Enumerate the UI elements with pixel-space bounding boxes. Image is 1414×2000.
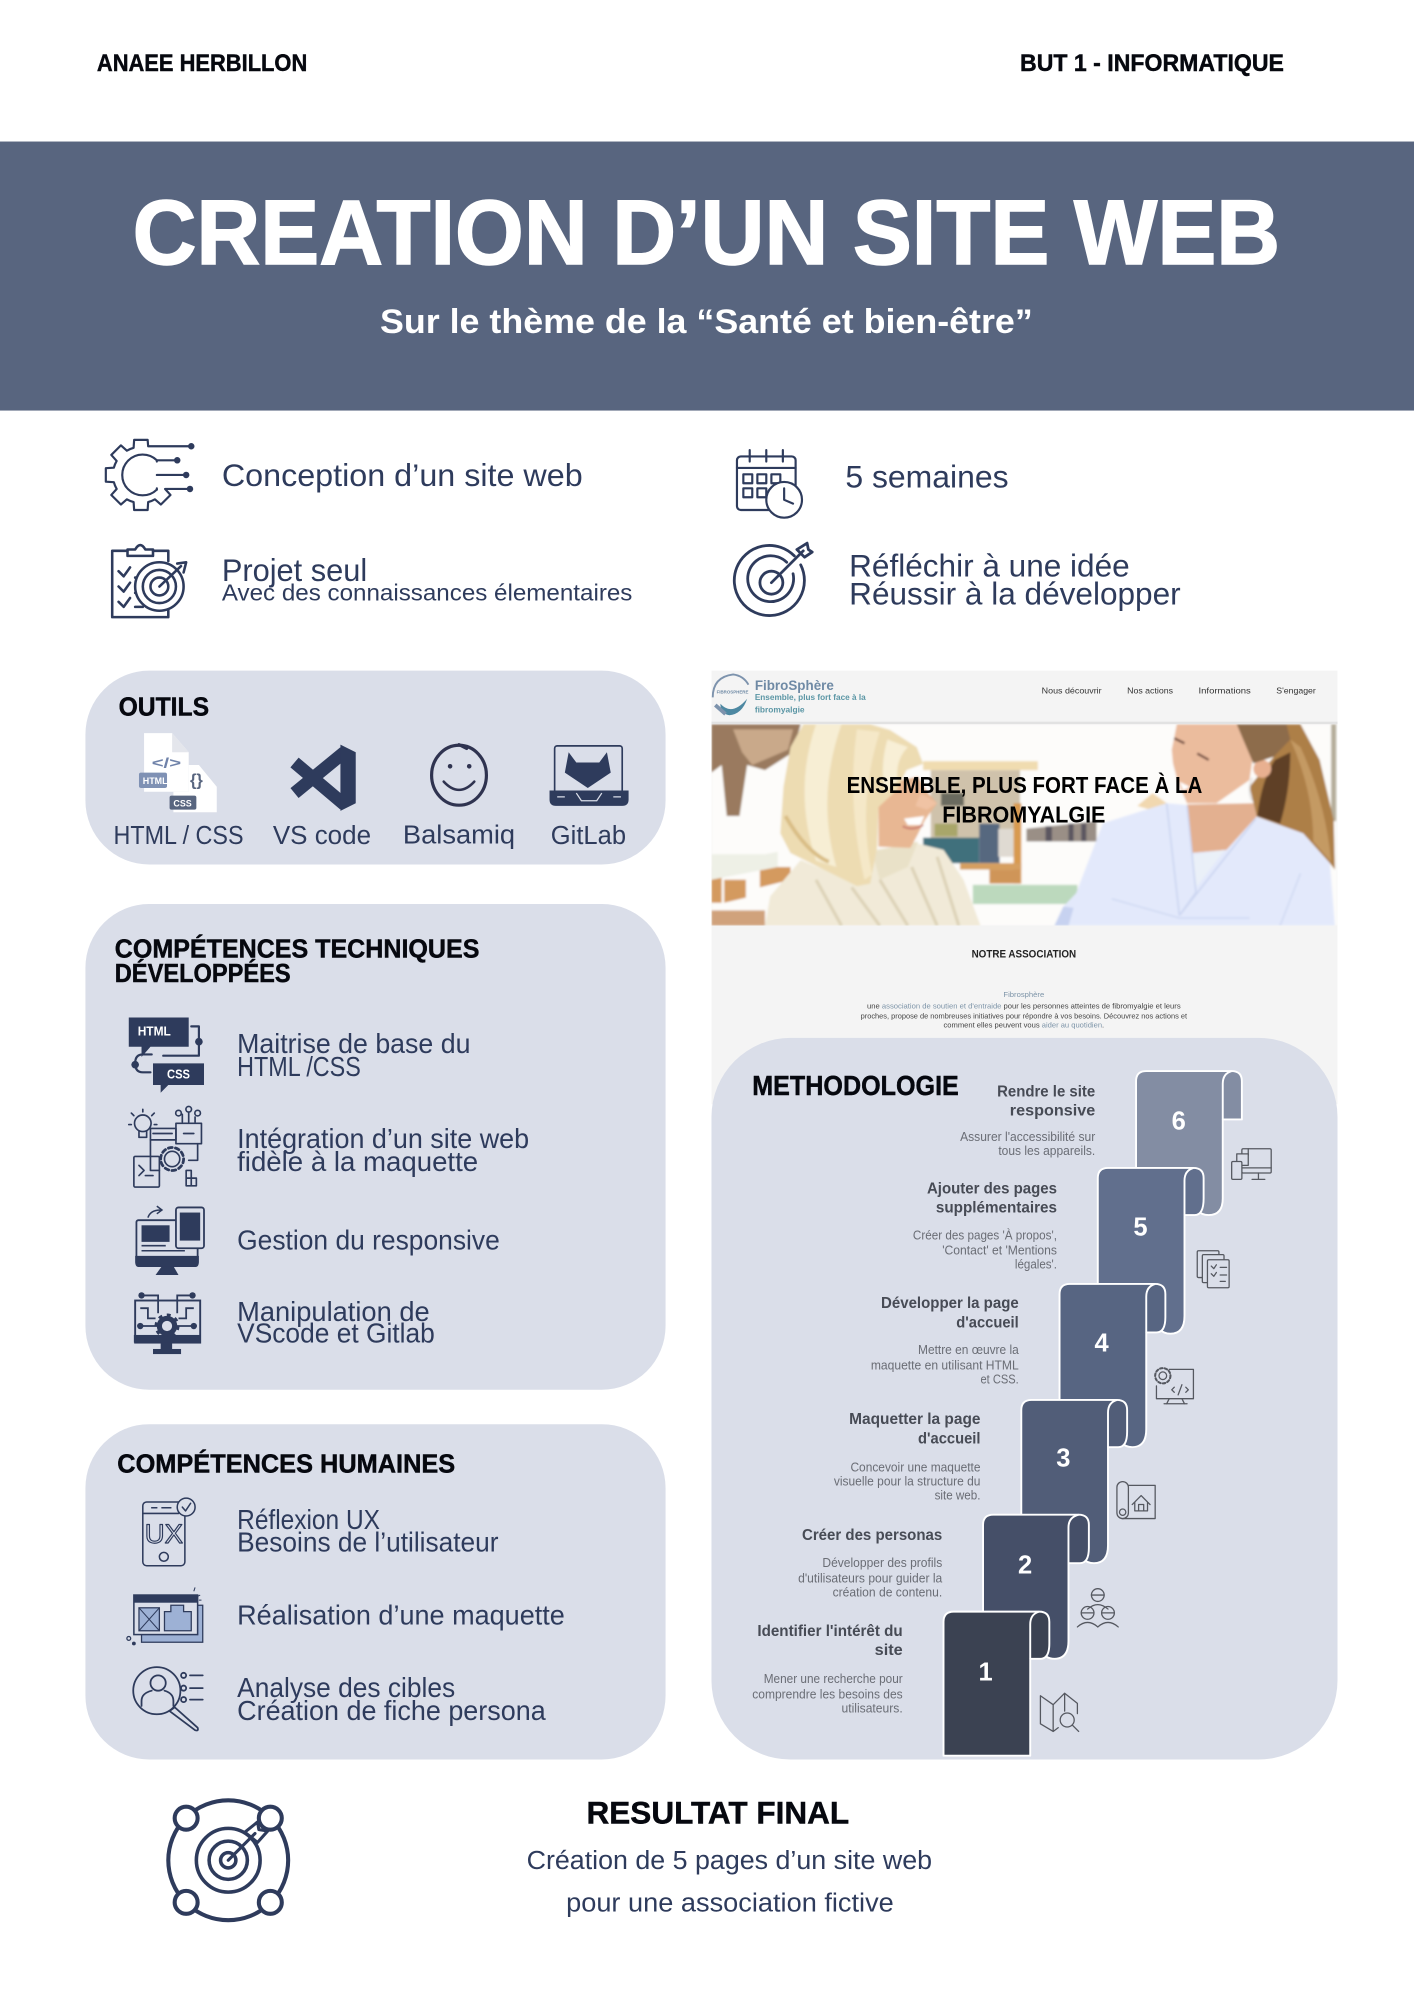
icon: result target xyxy=(168,1800,288,1920)
step 3 text: site web. xyxy=(935,1487,980,1502)
icon: integration xyxy=(129,1106,201,1187)
step 5 scroll xyxy=(1098,1168,1204,1334)
icon: gear and code monitor xyxy=(1155,1368,1193,1404)
website intro text: Fibrosphère xyxy=(1003,990,1044,999)
text: vscode gitlab: Manipulation de xyxy=(237,1296,430,1327)
icon: gitlab laptop xyxy=(550,746,629,806)
panel: competences techniques xyxy=(85,904,666,1390)
step 1 text: Identifier l'intérêt du xyxy=(757,1623,903,1640)
website nav links xyxy=(1042,686,1316,696)
step 6 text: responsive xyxy=(1010,1103,1095,1120)
website screenshot xyxy=(711,671,1337,1104)
step 4 text: d'accueil xyxy=(956,1314,1019,1331)
website tagline: Ensemble, plus fort face à la xyxy=(755,692,866,702)
step number 3: 3 xyxy=(1056,1444,1070,1472)
title banner xyxy=(0,142,1414,411)
icon: ux phone xyxy=(143,1498,195,1566)
result block xyxy=(527,1794,932,1917)
panel: outils xyxy=(85,671,666,864)
step 4 text: et CSS. xyxy=(980,1371,1019,1386)
website logo: FIBROSPHERE xyxy=(717,690,749,695)
result line 1: Création de 5 pages d’un site web xyxy=(527,1845,932,1875)
icon: html css files: HTML xyxy=(143,776,168,786)
heading: methodologie: METHODOLOGIE xyxy=(752,1070,959,1101)
step 2 text: d'utilisateurs pour guider la xyxy=(798,1570,943,1585)
step number 6: 6 xyxy=(1172,1108,1186,1136)
step 2 text: Créer des personas xyxy=(802,1527,942,1544)
step 3 scroll xyxy=(1021,1400,1127,1563)
result line 2: pour une association fictive xyxy=(566,1887,894,1917)
website tagline: fibromyalgie xyxy=(755,705,805,715)
step 6 text xyxy=(960,1084,1096,1158)
text: solo project xyxy=(222,552,632,606)
step 1 scroll xyxy=(944,1612,1049,1756)
text: html css mastery: HTML /CSS xyxy=(237,1051,361,1082)
step 1 text: Mener une recherche pour xyxy=(764,1671,903,1686)
icon: blueprint roll xyxy=(1117,1482,1155,1519)
text: integration: fidèle à la maquette xyxy=(237,1146,478,1177)
icon: devices xyxy=(1232,1149,1271,1179)
step 5 text: supplémentaires xyxy=(936,1200,1057,1217)
website intro text: comment elles peuvent vous aider au quotidien . xyxy=(944,1021,1104,1030)
author name: ANAEE HERBILLON xyxy=(97,50,307,76)
icon: html css bubbles: CSS xyxy=(167,1067,190,1082)
text: solo project: Projet seul xyxy=(222,552,367,588)
step number 5: 5 xyxy=(1133,1213,1148,1241)
label: html css: HTML / CSS xyxy=(113,820,244,850)
icon: html css bubbles: HTML xyxy=(138,1023,171,1038)
step 5 text: légales'. xyxy=(1015,1257,1057,1272)
text: responsive: Gestion du responsive xyxy=(237,1225,500,1256)
step 3 text: d'accueil xyxy=(918,1430,980,1447)
step 2 text xyxy=(798,1527,943,1599)
step 1 text: comprendre les besoins des xyxy=(752,1686,903,1701)
subtitle: Sur le thème de la “Santé et bien-être” xyxy=(380,303,1033,341)
website nav links: Nous découvrir xyxy=(1042,686,1102,696)
icon: vs code xyxy=(295,745,356,811)
text: target analysis: Création de fiche persona xyxy=(237,1695,546,1726)
icon: map and magnifier xyxy=(1040,1693,1079,1731)
photo background xyxy=(711,724,1336,926)
step 1 text: utilisateurs. xyxy=(842,1700,903,1715)
step 5 text: 'Contact' et 'Mentions xyxy=(942,1243,1057,1258)
website nav links: Nos actions xyxy=(1127,686,1174,696)
icon: gear with circuit lines xyxy=(106,440,193,510)
text: target analysis xyxy=(237,1672,546,1726)
icon: html css files: CSS xyxy=(173,798,192,808)
website hero heading: ENSEMBLE, PLUS FORT FACE À LA xyxy=(847,772,1202,798)
label: gitlab: GitLab xyxy=(551,820,626,850)
text: duration: 5 semaines xyxy=(845,459,1009,495)
website nav bar xyxy=(711,674,1337,724)
website nav links: Informations xyxy=(1199,686,1252,696)
text: conception: Conception d’un site web xyxy=(222,457,583,493)
sub text: Avec des connaissances élementaires xyxy=(222,580,632,606)
text: html css mastery: Maitrise de base du xyxy=(237,1028,470,1059)
step 2 text: création de contenu. xyxy=(833,1584,942,1599)
text: target analysis: Analyse des cibles xyxy=(237,1672,455,1703)
step 2 text: Développer des profils xyxy=(822,1555,942,1570)
step 1 text: site xyxy=(875,1642,903,1659)
step 1 text xyxy=(752,1623,903,1715)
result heading: RESULTAT FINAL xyxy=(587,1794,849,1830)
step number 2: 2 xyxy=(1018,1551,1032,1579)
icon: documents xyxy=(1197,1251,1229,1288)
website intro text: une association de soutien et d'entraide pour les personnes atteintes de fibromyalgie et leurs xyxy=(867,1002,1181,1011)
icon: html css files: {} xyxy=(190,770,203,789)
website logo xyxy=(713,674,749,715)
website hero photo xyxy=(711,724,1337,926)
label: vs code: VS code xyxy=(273,820,371,850)
text: mockup: Réalisation d’une maquette xyxy=(237,1599,565,1630)
nurse xyxy=(1054,724,1335,926)
step 6 text: Rendre le site xyxy=(997,1084,1095,1101)
text: integration xyxy=(237,1123,529,1177)
icon: monitor with circuit xyxy=(134,1292,200,1354)
main title: CREATION D’UN SITE WEB xyxy=(133,182,1280,284)
website hero heading: FIBROMYALGIE xyxy=(942,801,1105,827)
step 6 scroll xyxy=(1136,1071,1242,1215)
text: integration: Intégration d’un site web xyxy=(237,1123,529,1154)
icon: target with arrow xyxy=(734,543,812,616)
step 4 text: Mettre en œuvre la xyxy=(918,1342,1020,1357)
heading: competences humaines: COMPÉTENCES HUMAINES xyxy=(117,1449,455,1479)
step 3 text: Maquetter la page xyxy=(849,1411,980,1428)
text: ux: Besoins de l’utilisateur xyxy=(237,1527,499,1558)
step 4 scroll xyxy=(1060,1284,1165,1447)
step 5 text xyxy=(913,1180,1057,1272)
text: ux: Réflexion UX xyxy=(237,1504,380,1535)
heading: outils: OUTILS xyxy=(119,691,209,721)
step 2 scroll xyxy=(983,1515,1089,1659)
label: balsamiq: Balsamiq xyxy=(403,819,515,849)
icon: html css bubbles xyxy=(129,1017,204,1093)
step 4 text: Développer la page xyxy=(881,1295,1019,1312)
icon: personas xyxy=(1077,1589,1118,1627)
icon: magnifier person xyxy=(133,1667,203,1731)
icon: checklist with target xyxy=(112,545,186,617)
heading: competences techniques: COMPÉTENCES TECHNIQUES xyxy=(115,934,479,964)
text: goals: Réfléchir à une idée xyxy=(849,547,1130,583)
text: vscode gitlab: VScode et Gitlab xyxy=(237,1318,435,1349)
website nav links: S'engager xyxy=(1276,686,1316,696)
heading: competences techniques: DÉVELOPPÉES xyxy=(115,958,291,988)
icon: calendar and clock xyxy=(737,450,802,518)
website hero heading xyxy=(847,772,1202,827)
text: ux xyxy=(237,1504,499,1558)
step 4 text xyxy=(871,1295,1020,1386)
step 3 text: Concevoir une maquette xyxy=(850,1459,980,1474)
icon: ux phone: UX xyxy=(145,1519,183,1549)
step 6 text: Assurer l'accessibilité sur xyxy=(960,1129,1096,1144)
icon: responsive devices xyxy=(135,1206,204,1275)
text: goals xyxy=(849,547,1181,611)
text: html css mastery xyxy=(237,1028,470,1082)
step number 4: 4 xyxy=(1095,1330,1110,1358)
step 6 text: tous les appareils. xyxy=(998,1143,1095,1158)
step 5 text: Ajouter des pages xyxy=(927,1180,1057,1197)
icon: html css files: </> xyxy=(152,755,181,771)
step 5 text: Créer des pages 'À propos', xyxy=(913,1227,1057,1242)
course label: BUT 1 - INFORMATIQUE xyxy=(1020,50,1284,76)
website tagline xyxy=(755,692,866,715)
text: vscode gitlab xyxy=(237,1296,435,1349)
step 3 text xyxy=(834,1411,980,1502)
heading: competences techniques xyxy=(115,934,479,988)
panel: competences humaines xyxy=(85,1424,666,1760)
panel: methodologie xyxy=(711,1038,1337,1760)
step 3 text: visuelle pour la structure du xyxy=(834,1473,980,1488)
goal line 2: Réussir à la développer xyxy=(849,575,1181,611)
step number 1: 1 xyxy=(978,1658,993,1686)
website intro text xyxy=(861,990,1187,1030)
icon: wireframe windows xyxy=(127,1587,203,1645)
step 4 text: maquette en utilisant HTML xyxy=(871,1357,1019,1372)
icon: balsamiq xyxy=(432,745,486,805)
icon: html css files xyxy=(139,733,217,812)
website brand: FibroSphère xyxy=(755,677,834,693)
website section heading: NOTRE ASSOCIATION xyxy=(972,949,1076,961)
website intro text: proches, propose de nombreuses initiatives pour répondre à vos besoins. Découvrez nos actions et xyxy=(861,1012,1187,1021)
older woman xyxy=(765,724,980,926)
